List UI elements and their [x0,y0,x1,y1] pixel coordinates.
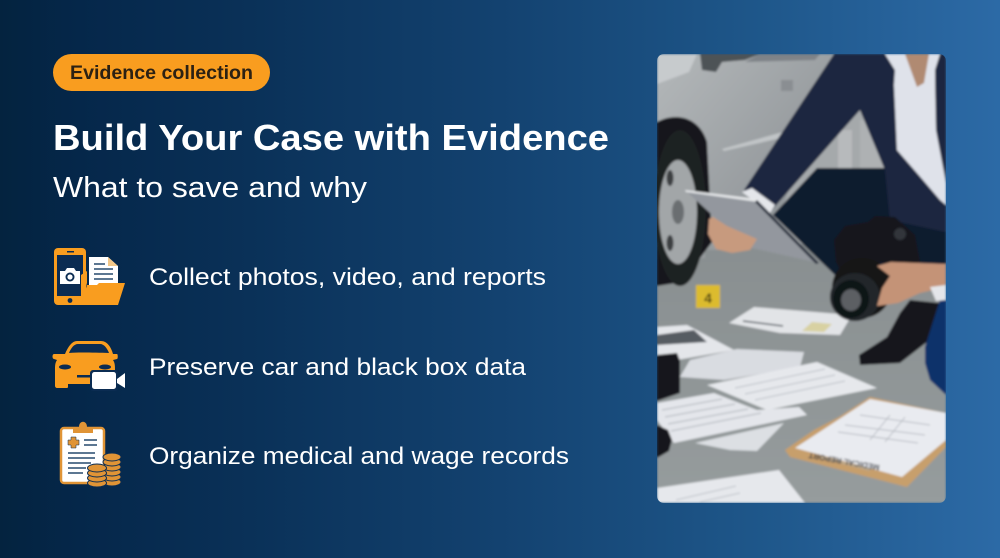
boot [859,300,940,365]
leg and trousers [773,168,946,285]
label: preserve data: Preserve car and black box data [149,354,527,381]
jacket lapel [935,54,946,183]
car [654,54,835,286]
shirt cuff [742,188,775,213]
photo: investigator documenting evidence at a car scene [654,54,946,503]
icon: phone, camera and folder [54,248,125,305]
black boxes on the floor [657,353,680,458]
evidence marker: 4 [704,290,712,306]
hand holding camera [877,262,946,306]
folder with medical report [785,397,946,487]
navy trouser leg [925,297,946,395]
shirt [885,54,946,205]
folder with medical report: MEDICAL REPORT [808,451,880,472]
label: collect photos: Collect photos, video, and reports [149,264,546,291]
icon: clipboard and coins [61,422,121,487]
subtitle: What to save and why [53,172,368,204]
tablet [685,190,819,264]
icon: car with video camera [52,341,125,391]
title: Build Your Case with Evidence [53,117,609,158]
label: organize records: Organize medical and wage records [149,443,569,470]
hand holding tablet [708,217,757,253]
neck [905,54,929,87]
camera [830,216,920,321]
scattered documents [657,307,877,503]
second cuff [930,285,946,301]
jacket [744,54,946,232]
badge: Evidence collection [53,54,270,91]
badge: Evidence collection: Evidence collection [70,63,253,84]
evidence marker [696,285,720,308]
